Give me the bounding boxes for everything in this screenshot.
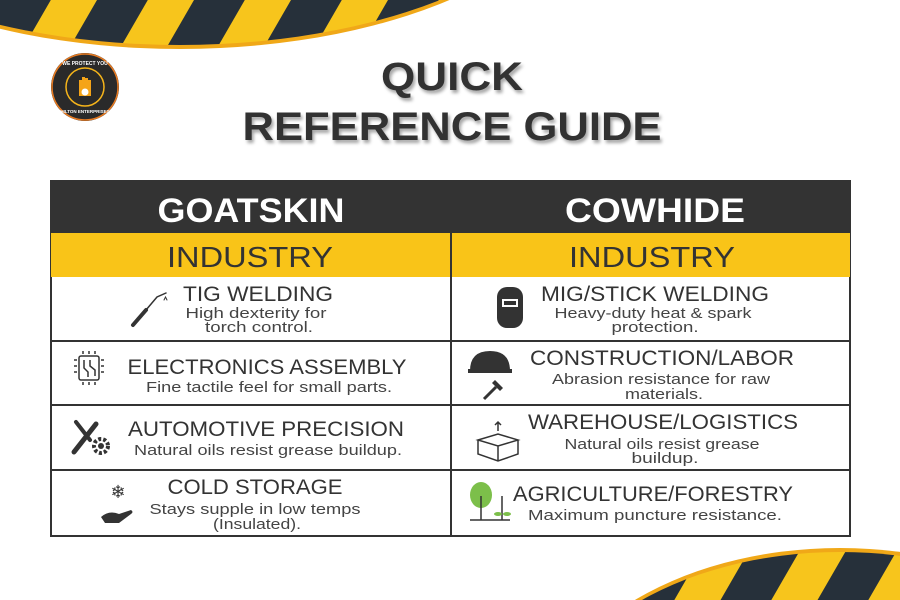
row: TIG welding: [133, 283, 333, 336]
title: REFERENCE GUIDE: [242, 105, 662, 149]
logo: Hilton Enterprises badge: HILTON ENTERPRISES: [60, 109, 110, 114]
title: QUICK: [381, 55, 523, 99]
icon: hard hat and hammer: [468, 351, 512, 399]
icon: snowflake over hand: [101, 482, 132, 523]
icon: circuit chip: [74, 351, 104, 385]
row: MIG/stick welding: [497, 283, 769, 336]
row: warehouse/logistics: [478, 411, 798, 467]
row: warehouse/logistics: WAREHOUSE/LOGISTICS: [528, 411, 798, 434]
icon: welding helmet: [497, 287, 523, 328]
row: MIG/stick welding: Heavy-duty heat & spark: [554, 305, 752, 322]
row: agriculture/forestry: [470, 482, 793, 524]
row: construction/labor: materials.: [625, 386, 703, 403]
icon: TIG torch: [133, 293, 167, 325]
row: MIG/stick welding: protection.: [612, 319, 698, 336]
row: construction/labor: [468, 347, 794, 403]
row: MIG/stick welding: MIG/STICK WELDING: [541, 283, 769, 306]
row: construction/labor: CONSTRUCTION/LABOR: [530, 347, 794, 370]
icon: wrench and gear: [74, 422, 108, 453]
row: TIG welding: torch control.: [205, 319, 313, 336]
row: electronics assembly: Fine tactile feel for small parts.: [146, 379, 392, 396]
row: electronics assembly: [74, 351, 406, 396]
decorative band: bottom hazard stripes: [635, 548, 900, 600]
subheader: industry: [51, 233, 850, 277]
icon: open box with arrow: [478, 422, 518, 461]
row: automotive precision: [74, 418, 404, 459]
row: cold storage: [101, 476, 360, 533]
subheader: industry: INDUSTRY: [167, 242, 333, 274]
row: construction/labor: Abrasion resistance for raw: [552, 371, 770, 388]
row: warehouse/logistics: buildup.: [632, 450, 698, 467]
row: electronics assembly: ELECTRONICS ASSEMBLY: [128, 356, 406, 379]
row: automotive precision: Natural oils resist grease buildup.: [134, 442, 402, 459]
row: TIG welding: TIG WELDING: [183, 283, 333, 306]
title: [242, 55, 662, 149]
header: goatskin / cowhide: COWHIDE: [565, 192, 745, 230]
header: goatskin / cowhide: [51, 181, 850, 233]
logo: Hilton Enterprises badge: [51, 53, 119, 121]
decorative band: top hazard stripes: [0, 0, 450, 49]
row: automotive precision: AUTOMOTIVE PRECISION: [128, 418, 404, 441]
row: warehouse/logistics: Natural oils resist grease: [564, 436, 760, 453]
row: TIG welding: High dexterity for: [186, 305, 326, 322]
icon: tree and plant: [470, 482, 511, 520]
header: goatskin / cowhide: GOATSKIN: [158, 192, 344, 230]
logo: Hilton Enterprises badge: WE PROTECT YOU: [62, 61, 108, 67]
icon: snowflake over hand: ❄: [110, 482, 126, 502]
subheader: industry: INDUSTRY: [569, 242, 735, 274]
row: cold storage: (Insulated).: [213, 516, 301, 533]
table: [51, 181, 850, 536]
row: cold storage: Stays supple in low temps: [150, 501, 360, 518]
row: cold storage: COLD STORAGE: [168, 476, 342, 499]
row: agriculture/forestry: Maximum puncture resistance.: [528, 507, 782, 524]
row: agriculture/forestry: AGRICULTURE/FORESTRY: [513, 483, 793, 506]
